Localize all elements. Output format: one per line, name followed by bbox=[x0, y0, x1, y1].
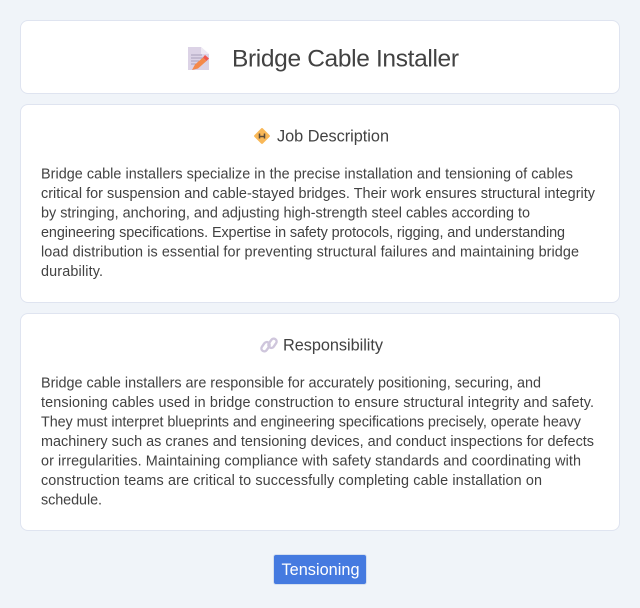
title: Bridge Cable Installer bbox=[232, 46, 459, 72]
icon: road sign bbox=[254, 128, 270, 144]
text: responsibility body: Bridge cable installers are responsible for accurately positioning, securing, and bbox=[41, 376, 541, 392]
tag: Tensioning bbox=[273, 554, 367, 585]
text: job description body: durability. bbox=[41, 264, 103, 280]
heading: job description: Job Description bbox=[277, 128, 389, 146]
text: responsibility body: machinery such as cranes and tensioning devices, and conduct inspections for defects bbox=[41, 434, 594, 450]
text: responsibility body: schedule. bbox=[41, 492, 102, 508]
text: responsibility body: They must interpret blueprints and engineering specifications precisely, operate heavy bbox=[41, 414, 582, 430]
panel: responsibility bbox=[20, 313, 620, 531]
icon: document with pencil bbox=[188, 47, 209, 70]
text: responsibility body: or irregularities. Maintaining compliance with safety standards and coordinating with bbox=[41, 454, 581, 470]
heading: responsibility: Responsibility bbox=[283, 336, 384, 354]
icon: chain link bbox=[260, 338, 278, 352]
text: responsibility body: tensioning cables used in bridge construction to ensure structural integrity and safety. bbox=[41, 395, 594, 411]
text: job description body: Bridge cable installers specialize in the precise installation and tensioning of cables bbox=[41, 166, 573, 182]
panel: job description bbox=[20, 104, 620, 303]
text: job description body: critical for suspension and cable-stayed bridges. Their work ensures structural integrity bbox=[41, 186, 596, 202]
text: job description body: by stringing, anchoring, and adjusting high-strength steel cables according to bbox=[41, 206, 530, 222]
text: responsibility body bbox=[41, 376, 594, 508]
text: job description body: engineering specifications. Expertise in safety protocols, rigging, and understanding bbox=[41, 225, 565, 241]
panel: title card bbox=[20, 20, 620, 94]
text: job description body: load distribution is essential for preventing structural failures and maintaining bridge bbox=[41, 244, 579, 260]
text: job description body bbox=[41, 166, 596, 280]
text: responsibility body: construction teams are critical to successfully completing cable installation on bbox=[41, 473, 542, 489]
tag: Tensioning: Tensioning bbox=[282, 561, 360, 579]
